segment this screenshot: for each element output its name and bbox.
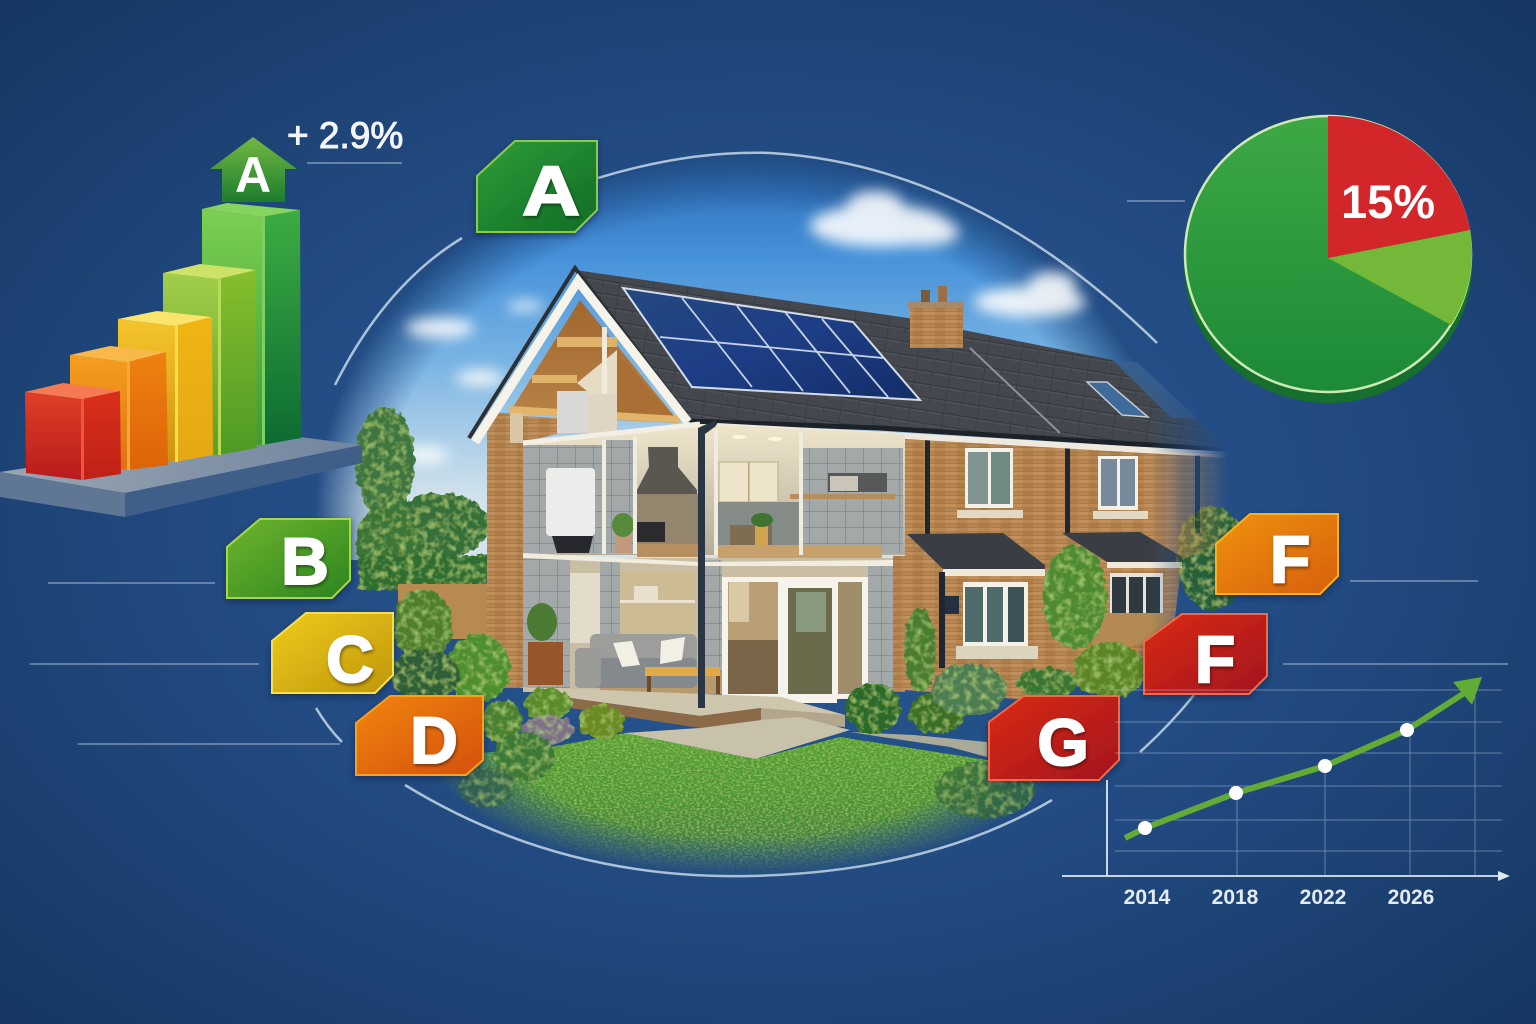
- right tree: [1176, 506, 1248, 610]
- upper windows: [965, 448, 1013, 508]
- left brick pillar: [487, 413, 557, 688]
- sofa: [590, 634, 697, 674]
- floor slab: [523, 553, 893, 566]
- badge D: D: [410, 703, 458, 777]
- bar orange: [70, 346, 168, 470]
- data points: [1138, 723, 1414, 835]
- drainpipe: [698, 420, 716, 708]
- decorative leader lines: [30, 201, 1508, 744]
- year labels: 2022: [1300, 886, 1346, 909]
- backsplash: [637, 494, 698, 544]
- arrow A: A: [235, 147, 271, 203]
- boiler: [546, 468, 595, 536]
- bar lime: [163, 264, 257, 455]
- arrow A: [210, 137, 297, 203]
- porch roofs: [907, 533, 1045, 569]
- trend line: [1125, 677, 1482, 838]
- bar green: [202, 203, 301, 445]
- eave and fascia: [690, 421, 1230, 450]
- badge C: C: [326, 622, 374, 696]
- spotlights: [732, 435, 782, 441]
- pie depth: [1184, 127, 1472, 403]
- badge A: [477, 141, 597, 232]
- gable trim: [469, 268, 690, 442]
- sliding door: [722, 577, 868, 699]
- badge D: [356, 696, 483, 777]
- platform: [0, 437, 362, 517]
- badge F red: [1144, 614, 1267, 696]
- upper beam: [523, 424, 700, 443]
- bushes and foreground planting: [391, 545, 1146, 818]
- badge F orange: [1216, 514, 1338, 596]
- badge C: [272, 613, 393, 696]
- kitchen units: [719, 462, 778, 502]
- patio: [519, 687, 987, 759]
- axes: [1062, 780, 1510, 881]
- badge A: A: [522, 152, 580, 230]
- cutaway lower floor: [523, 556, 905, 703]
- green slice: [1185, 116, 1471, 392]
- growth label: + 2.9%: [287, 115, 403, 156]
- roof windows: [1087, 382, 1148, 417]
- red slice: [1328, 116, 1470, 258]
- ground windows: [963, 582, 1028, 648]
- badge B: [227, 519, 350, 598]
- main roof: [575, 270, 1230, 455]
- badge F red: F: [1195, 622, 1235, 696]
- year labels: 2014: [1124, 886, 1171, 909]
- scene: sky oval: [300, 150, 1200, 876]
- grid: [1115, 690, 1502, 876]
- trees and garden backdrop: [355, 407, 1248, 639]
- bar yellow: [118, 311, 213, 462]
- badge B: B: [281, 524, 329, 598]
- badge G: G: [1037, 705, 1089, 779]
- floor: [600, 672, 722, 694]
- year labels: 2026: [1388, 886, 1434, 909]
- badge F orange: F: [1270, 522, 1310, 596]
- light green slice: [1328, 230, 1472, 325]
- line chart: [1062, 677, 1510, 909]
- attic gable: [510, 300, 680, 434]
- cutaway upper floor: [523, 424, 905, 559]
- pie chart: 15%: [1341, 175, 1435, 228]
- bar chart: [0, 115, 403, 517]
- clouds: [401, 191, 1086, 463]
- potted plant and cabinet: [527, 603, 557, 641]
- solar panels: [623, 288, 920, 400]
- kitchen counter: [718, 545, 882, 559]
- oval outline: [316, 153, 1194, 876]
- house: [469, 268, 1230, 759]
- year labels: 2018: [1212, 886, 1259, 909]
- badge G: [989, 696, 1119, 780]
- lawn: [446, 733, 1038, 874]
- chimney: [908, 286, 964, 348]
- pie chart: [1184, 116, 1472, 403]
- year labels: [1124, 886, 1434, 909]
- drainpipes: [925, 440, 930, 537]
- right brick wing: [905, 438, 1230, 700]
- kitchen extractor: [637, 447, 697, 494]
- bar red: [25, 383, 121, 480]
- wooden fence: [398, 584, 488, 639]
